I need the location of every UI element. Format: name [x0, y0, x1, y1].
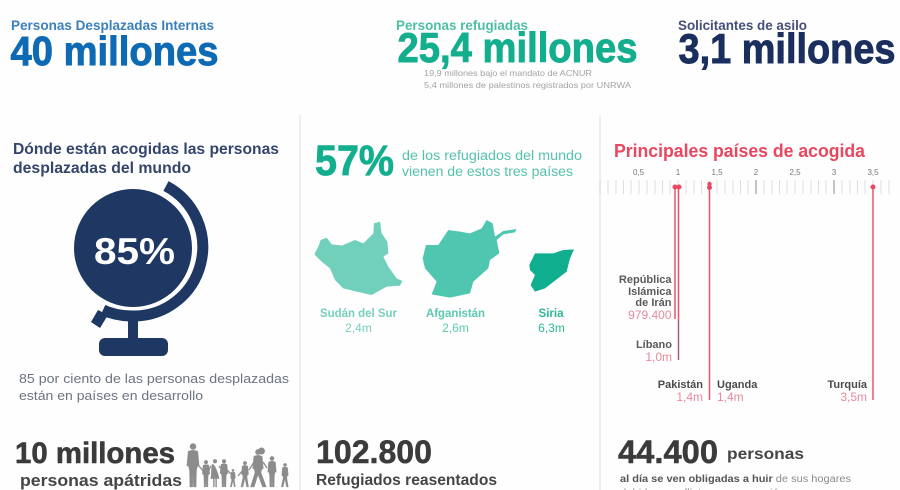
text: 85 percent caption: están en países en desarrollo	[19, 388, 203, 403]
chart: host country scale: 3	[832, 168, 837, 177]
heading: main host countries: Principales países de acogida	[614, 140, 866, 161]
icon: globe with 85%	[74, 186, 203, 356]
label: Turkey: 3,5m	[840, 390, 867, 404]
headline: internally displaced people: Personas Desplazadas Internas	[11, 17, 214, 33]
label: Uganda	[717, 379, 758, 404]
label: Iran: 979.400	[628, 308, 672, 322]
label: Syria	[538, 308, 565, 335]
headline: refugees: 19,9 millones bajo el mandato de ACNUR	[424, 68, 592, 78]
stat: 57 percent: de los refugiados del mundo	[402, 148, 582, 163]
headline: refugees	[396, 17, 638, 90]
stat: people forced to flee per day: personas	[727, 446, 804, 463]
label: Syria: 6,3m	[538, 321, 565, 335]
label: Lebanon: Líbano	[636, 339, 672, 351]
stat: people forced to flee per day: al día se ven obligadas a huir de sus hogares	[620, 474, 851, 485]
label: Afghanistan: 2,6m	[442, 321, 469, 335]
icon: globe with 85%: 85%	[94, 231, 175, 272]
chart: host country scale: 1	[676, 168, 681, 177]
chart: host country scale: 1,5	[711, 168, 723, 177]
label: Uganda: Uganda	[717, 379, 758, 391]
stat: resettled refugees	[316, 434, 497, 489]
panel: origin countries	[314, 137, 582, 335]
panel: main host countries	[600, 140, 889, 404]
stat: resettled refugees: 102.800	[316, 434, 432, 470]
headline: refugees: Personas refugiadas	[396, 17, 528, 33]
label: Uganda: 1,4m	[717, 390, 744, 404]
text: 85 percent caption	[19, 371, 290, 403]
stat: people forced to flee per day: 44.400	[618, 434, 718, 470]
map: Syria	[529, 249, 574, 292]
label: Iran	[619, 274, 672, 322]
label: Afghanistan: Afganistán	[426, 308, 485, 320]
stat: 57 percent: 57%	[315, 137, 394, 185]
chart: host country scale: 2,5	[789, 168, 801, 177]
label: Afghanistan	[426, 308, 485, 335]
heading: hosting: Dónde están acogidas las personas	[13, 141, 279, 158]
stat: stateless people: 10 millones	[15, 437, 175, 470]
chart: host country scale: 3,5	[867, 168, 879, 177]
label: Iran: República	[619, 274, 672, 286]
label: Lebanon	[636, 339, 672, 364]
headline: refugees: 25,4 millones	[398, 24, 638, 71]
stat: people forced to flee per day	[618, 434, 851, 490]
headline: refugees: 5,4 millones de palestinos registrados por UNRWA	[424, 80, 631, 90]
stat: 57 percent: vienen de estos tres países	[402, 164, 573, 179]
label: South Sudan	[320, 308, 398, 335]
heading: hosting	[13, 141, 279, 177]
map: South Sudan	[314, 222, 402, 295]
label: Pakistan: 1,4m	[676, 390, 703, 404]
stat: 57 percent	[315, 137, 582, 185]
label: Turkey	[827, 379, 868, 404]
label: South Sudan: Sudán del Sur	[320, 308, 398, 320]
headline: internally displaced people: 40 millones	[10, 28, 218, 74]
label: Iran: Islámica	[628, 286, 672, 298]
label: Syria: Siria	[539, 308, 564, 320]
chart: host country scale	[600, 168, 889, 400]
map: Afghanistan	[423, 220, 517, 298]
label: South Sudan: 2,4m	[345, 321, 372, 335]
label: Pakistan: Pakistán	[658, 379, 703, 391]
label: Iran: de Irán	[635, 297, 672, 309]
panel: where displaced people are hosted	[13, 141, 290, 403]
headline: asylum seekers: Solicitantes de asilo	[678, 17, 807, 33]
label: Lebanon: 1,0m	[645, 350, 672, 364]
label: Turkey: Turquía	[827, 379, 868, 391]
stat: resettled refugees: Refugiados reasentados	[316, 472, 497, 489]
heading: hosting: desplazadas del mundo	[13, 160, 191, 177]
label: Pakistan	[658, 379, 703, 404]
text: 85 percent caption: 85 por ciento de las personas desplazadas	[19, 371, 290, 386]
stat: stateless people: personas apátridas	[20, 472, 182, 490]
icon: group of people silhouettes	[187, 443, 288, 487]
chart: host country scale: 2	[754, 168, 759, 177]
stat: stateless people	[15, 437, 182, 490]
chart: host country scale: 0,5	[633, 168, 645, 177]
